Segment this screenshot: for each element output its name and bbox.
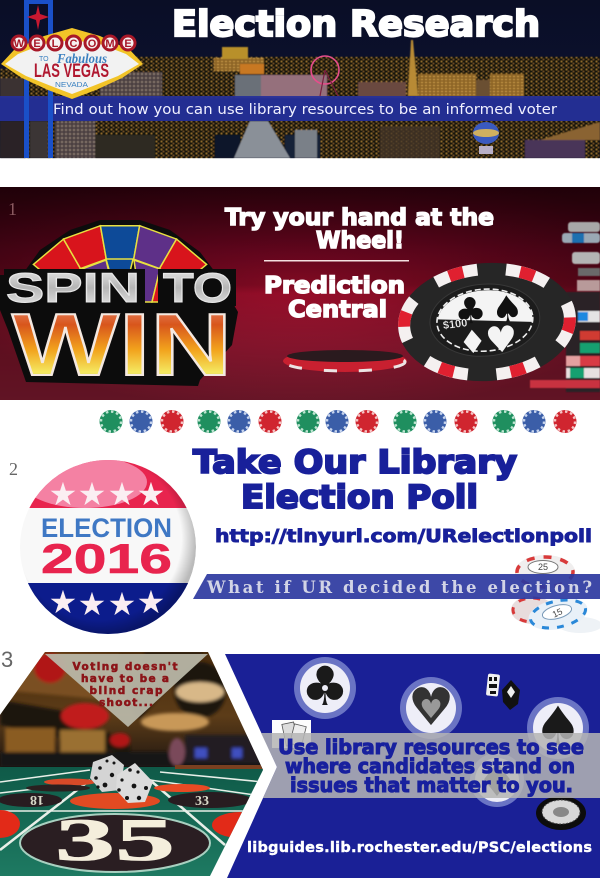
text: use library resources: issues that matter to you. — [290, 773, 573, 797]
icon: election 2016 button: ★ — [137, 475, 165, 513]
icon: club badge: ♣ — [301, 655, 349, 718]
roulette table photo — [0, 650, 270, 877]
icon: spade badge: ♠ — [534, 695, 582, 758]
gray text band — [261, 733, 600, 798]
icon: chips 25 and 15: 15 — [551, 606, 564, 620]
callout: blind crap shoot: blind crap — [90, 685, 163, 697]
icon: welcome to las vegas sign: E — [33, 38, 41, 50]
icon: election 2016 button: ELECTION — [41, 513, 172, 543]
poll url: http://tinyurl.com/URelectionpoll — [215, 526, 592, 547]
big wheel — [311, 56, 339, 96]
paris hotel balloon — [473, 122, 499, 154]
icon: small dice — [486, 673, 520, 710]
icon: election 2016 button: ★ — [49, 583, 77, 621]
subtitle: Find out how you can use library resources to be an informed voter — [53, 102, 557, 118]
large casino chip: ♦ — [457, 322, 488, 362]
city night photo backdrop — [0, 0, 600, 158]
heading: take our library election poll: Election Poll — [241, 478, 478, 516]
icon: welcome to las vegas sign: O — [88, 38, 97, 50]
icon: election 2016 button: ★ — [108, 475, 136, 513]
icon: election 2016 button: ★ — [78, 475, 106, 513]
icon: heart badge: ♥ — [419, 695, 443, 725]
icon: election 2016 button — [20, 456, 196, 635]
casino felt background — [0, 187, 600, 400]
heading: prediction central: Prediction — [264, 273, 405, 299]
panel: library resources — [225, 654, 600, 878]
heading: try your hand: Try your hand at the — [225, 205, 494, 231]
libguide url: libguides.lib.rochester.edu/PSC/elections — [247, 840, 592, 856]
icon: welcome to las vegas sign: L — [52, 38, 59, 50]
icon: election 2016 button: ★ — [78, 585, 106, 623]
large casino chip: ♥ — [484, 319, 519, 362]
large casino chip — [394, 257, 580, 387]
icon: chips 25 and 15 — [511, 555, 600, 635]
chip stack right — [530, 222, 600, 392]
section number 3: 3 — [1, 647, 13, 672]
heading: take our library election poll — [193, 443, 517, 516]
section number 2: 2 — [9, 459, 18, 479]
text: use library resources — [278, 735, 584, 797]
callout: blind crap shoot: Voting doesn't — [72, 661, 178, 673]
large casino chip: ♠ — [490, 288, 525, 332]
icon: election 2016 button: ★ — [137, 583, 165, 621]
icon: welcome to las vegas sign: E — [124, 38, 132, 50]
icon: diamond badge: ♦ — [476, 753, 518, 807]
callout: blind crap shoot — [45, 654, 208, 727]
panel: header city banner — [0, 0, 600, 158]
panel: election poll — [9, 443, 600, 635]
callout: blind crap shoot: have to be a — [81, 673, 169, 685]
heading: take our library election poll: Take Our Library — [193, 443, 517, 481]
flat chip on table — [283, 350, 407, 372]
icon: welcome to las vegas sign: M — [105, 38, 115, 50]
welcome bulbs — [12, 36, 135, 50]
title: Election Research — [172, 4, 540, 45]
row of poker chips — [100, 410, 576, 433]
subtitle band — [0, 96, 600, 121]
prize wheel — [33, 226, 207, 302]
roulette table photo: 18 — [30, 792, 44, 807]
panel: casino floor photo — [0, 650, 270, 877]
text: use library resources: where candidates stand on — [285, 754, 575, 778]
icon: welcome to las vegas sign: TO — [39, 56, 49, 63]
banner: what if UR decided: What if UR decided the election? — [206, 578, 592, 597]
heading: try your hand — [225, 205, 494, 254]
icon: heart badge: ♥ — [408, 678, 454, 738]
divider line — [264, 260, 409, 262]
large casino chip: $100 — [442, 317, 468, 332]
icon: election 2016 button: 2016 — [41, 535, 172, 582]
large casino chip: ♣ — [453, 290, 488, 333]
icon: welcome to las vegas sign: W — [14, 38, 25, 50]
spin to win logo — [0, 220, 238, 394]
win text: WIN — [12, 295, 232, 394]
spin to text: SPIN — [6, 264, 140, 311]
heading: try your hand: Wheel! — [316, 228, 404, 254]
icon: welcome to las vegas sign — [1, 0, 143, 158]
number 35: 35 — [55, 807, 175, 873]
icon: roulette wheel — [536, 796, 586, 830]
icon: chips 25 and 15: 25 — [538, 562, 548, 572]
text: use library resources: Use library resources to see — [278, 735, 584, 759]
heading: prediction central: Central — [288, 297, 387, 323]
icon: welcome to las vegas sign: C — [70, 38, 78, 50]
panel: spin to win — [0, 187, 600, 400]
spin to win logo: TO — [163, 264, 232, 311]
heading: prediction central — [264, 273, 405, 323]
blue arrow panel — [225, 654, 600, 878]
icon: welcome to las vegas sign: Fabulous — [56, 52, 107, 67]
table markings — [0, 770, 263, 850]
icon: welcome to las vegas sign: LAS VEGAS — [34, 61, 109, 82]
roulette table photo: 33 — [195, 794, 209, 809]
icon: election 2016 button: ★ — [49, 475, 77, 513]
icon: election 2016 button: ★ — [108, 585, 136, 623]
section number 1: 1 — [8, 199, 17, 219]
icon: dice — [90, 755, 153, 803]
callout: blind crap shoot: shoot... — [99, 697, 153, 709]
icon: playing cards — [272, 720, 311, 748]
icon: welcome to las vegas sign: NEVADA — [55, 80, 88, 89]
